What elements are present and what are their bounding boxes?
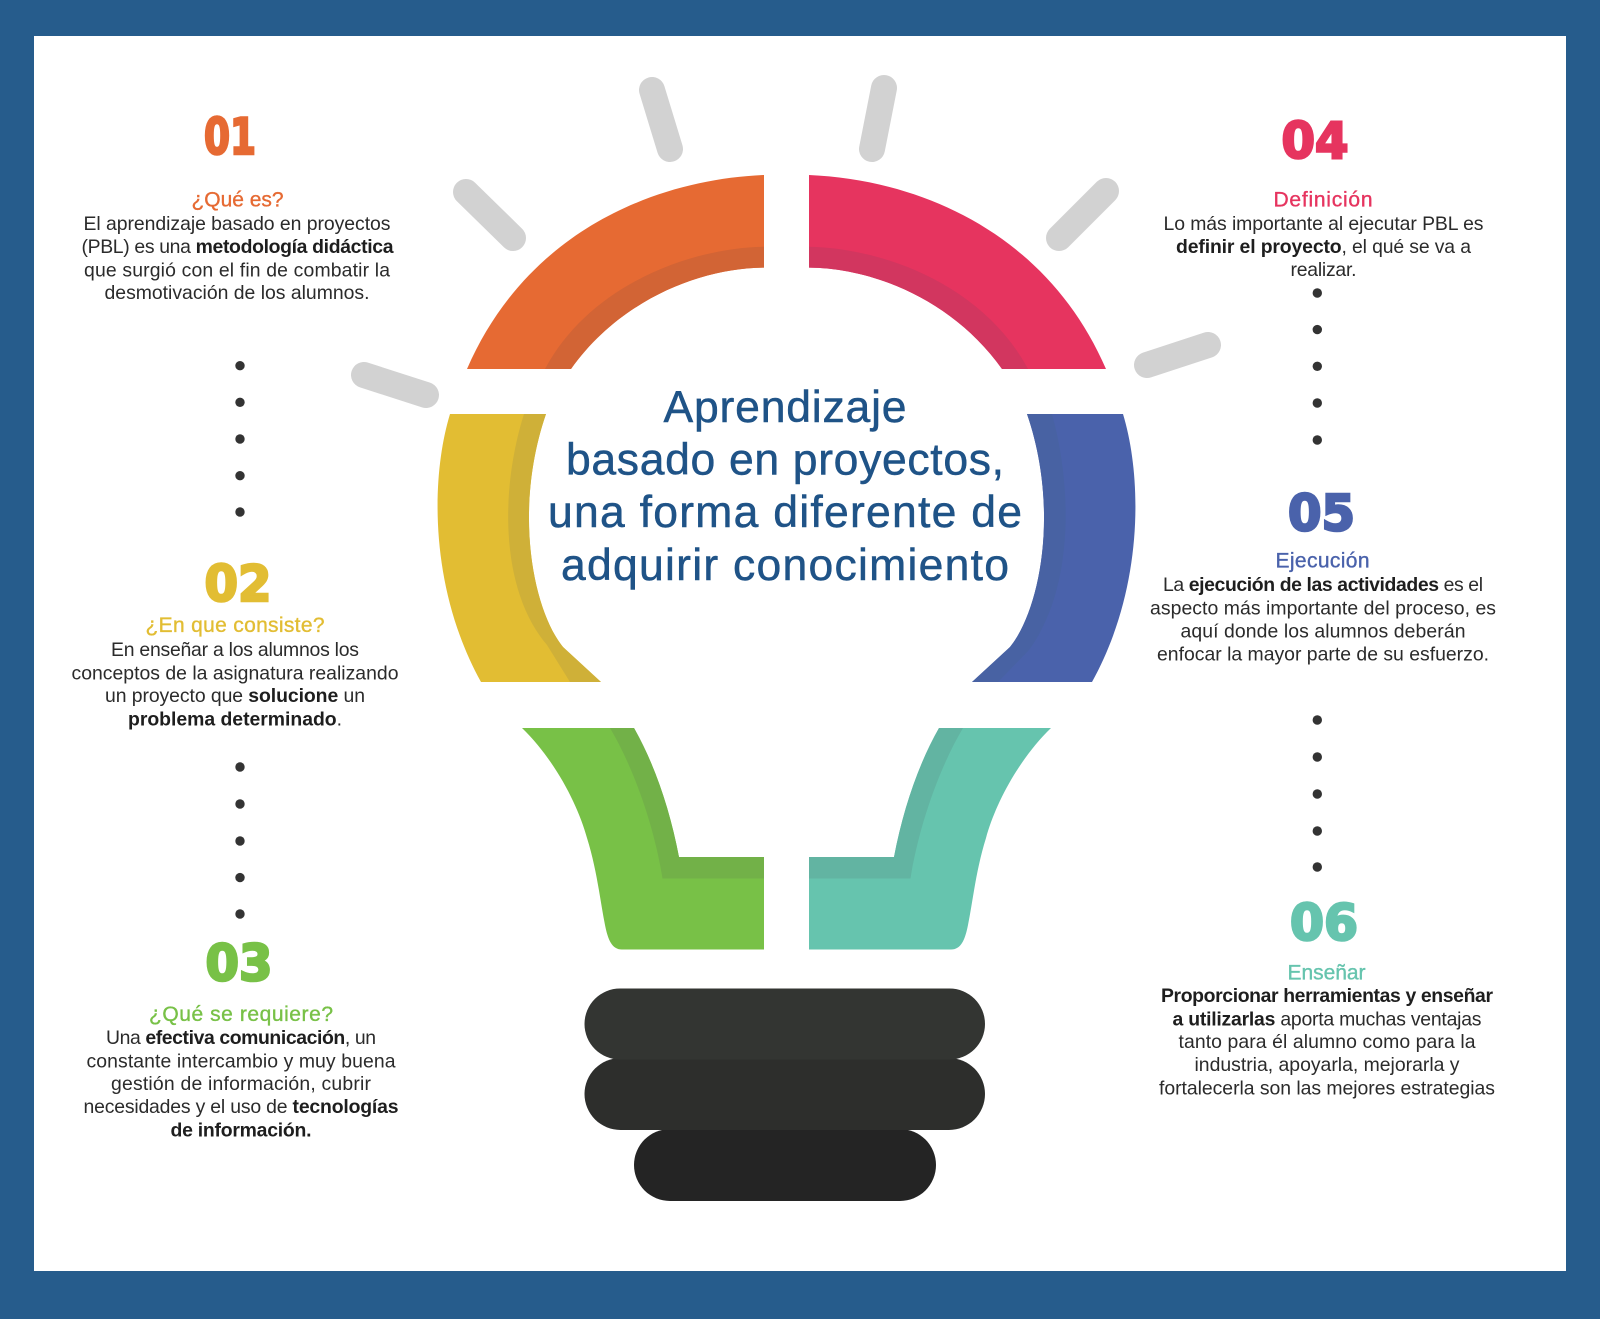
bulb segment: orange bbox=[467, 175, 764, 369]
body text: conceptos de la asignatura realizando bbox=[72, 662, 398, 684]
title bbox=[548, 383, 1022, 590]
body text: fortalecerla son las mejores estrategias bbox=[1159, 1078, 1495, 1100]
number 03: 03 bbox=[206, 934, 272, 992]
body text: que surgió con el fin de combatir la bbox=[84, 260, 390, 282]
body text: realizar. bbox=[1290, 259, 1356, 281]
number 02: 02 bbox=[204, 555, 272, 613]
panel: 02 En que consiste bbox=[72, 555, 398, 730]
body text bbox=[82, 213, 394, 304]
body text: tanto para él alumno como para la bbox=[1178, 1031, 1476, 1053]
body text: un proyecto que solucione un bbox=[105, 685, 365, 707]
bulb segment: blue bbox=[972, 414, 1135, 682]
bulb segment: red bbox=[809, 175, 1106, 369]
heading: Ejecución bbox=[1276, 550, 1370, 573]
bulb segment: yellow bbox=[438, 414, 601, 682]
title: una forma diferente de bbox=[548, 488, 1022, 537]
body text bbox=[1164, 213, 1484, 281]
bulb rays bbox=[364, 88, 1208, 395]
panel: 06 Enseñar bbox=[1159, 894, 1495, 1100]
body text: de información. bbox=[170, 1120, 312, 1142]
body text: aspecto más importante del proceso, es bbox=[1150, 598, 1496, 620]
body text: enfocar la mayor parte de su esfuerzo. bbox=[1157, 644, 1489, 666]
dotted connector left 1 bbox=[235, 361, 245, 517]
dotted connector left 2 bbox=[235, 762, 245, 919]
panel: 03 Qué se requiere bbox=[84, 934, 398, 1142]
panel: 04 Definición bbox=[1164, 112, 1484, 281]
body text: industria, apoyarla, mejorarla y bbox=[1194, 1054, 1460, 1076]
body text: (PBL) es una metodología didáctica bbox=[82, 236, 394, 258]
bulb segment: teal bbox=[809, 728, 1051, 950]
bulb base bbox=[584, 988, 985, 1201]
body text: a utilizarlas aporta muchas ventajas bbox=[1172, 1008, 1482, 1030]
body text: problema determinado. bbox=[128, 708, 342, 730]
number 01: 01 bbox=[204, 108, 256, 166]
dotted connector right 2 bbox=[1313, 715, 1322, 872]
body text: gestión de información, cubrir bbox=[111, 1073, 372, 1095]
heading: Definición bbox=[1274, 189, 1372, 212]
heading: ¿Qué se requiere? bbox=[149, 1003, 333, 1026]
body text: constante intercambio y muy buena bbox=[86, 1050, 396, 1072]
number 04: 04 bbox=[1282, 112, 1348, 170]
number 05: 05 bbox=[1288, 484, 1355, 542]
body text: En enseñar a los alumnos los bbox=[111, 639, 359, 661]
body text bbox=[72, 639, 398, 730]
title: Aprendizaje bbox=[664, 383, 906, 432]
body text: Lo más importante al ejecutar PBL es bbox=[1164, 213, 1484, 235]
body text bbox=[1159, 985, 1495, 1100]
bulb segment: green bbox=[522, 728, 764, 950]
body text: El aprendizaje basado en proyectos bbox=[84, 213, 390, 235]
panel: 05 Ejecución bbox=[1150, 484, 1496, 666]
body text: La ejecución de las actividades es el bbox=[1163, 574, 1483, 596]
title: basado en proyectos, bbox=[566, 436, 1004, 484]
heading: Enseñar bbox=[1288, 962, 1366, 984]
light bulb illustration bbox=[364, 88, 1208, 1201]
dotted connector right 1 bbox=[1313, 288, 1322, 445]
body text: Proporcionar herramientas y enseñar bbox=[1161, 985, 1493, 1007]
title: adquirir conocimiento bbox=[561, 541, 1009, 590]
panel: 01 Qué es bbox=[82, 108, 394, 304]
body text: aquí donde los alumnos deberán bbox=[1180, 620, 1466, 642]
body text bbox=[1150, 574, 1496, 666]
number 06: 06 bbox=[1290, 894, 1358, 952]
body text: necesidades y el uso de tecnologías bbox=[84, 1096, 398, 1118]
heading: ¿Qué es? bbox=[192, 189, 284, 212]
body text: Una efectiva comunicación, un bbox=[106, 1027, 376, 1049]
body text bbox=[84, 1027, 398, 1142]
body text: desmotivación de los alumnos. bbox=[104, 282, 370, 304]
heading: ¿En que consiste? bbox=[146, 614, 324, 637]
body text: definir el proyecto, el qué se va a bbox=[1176, 236, 1471, 258]
